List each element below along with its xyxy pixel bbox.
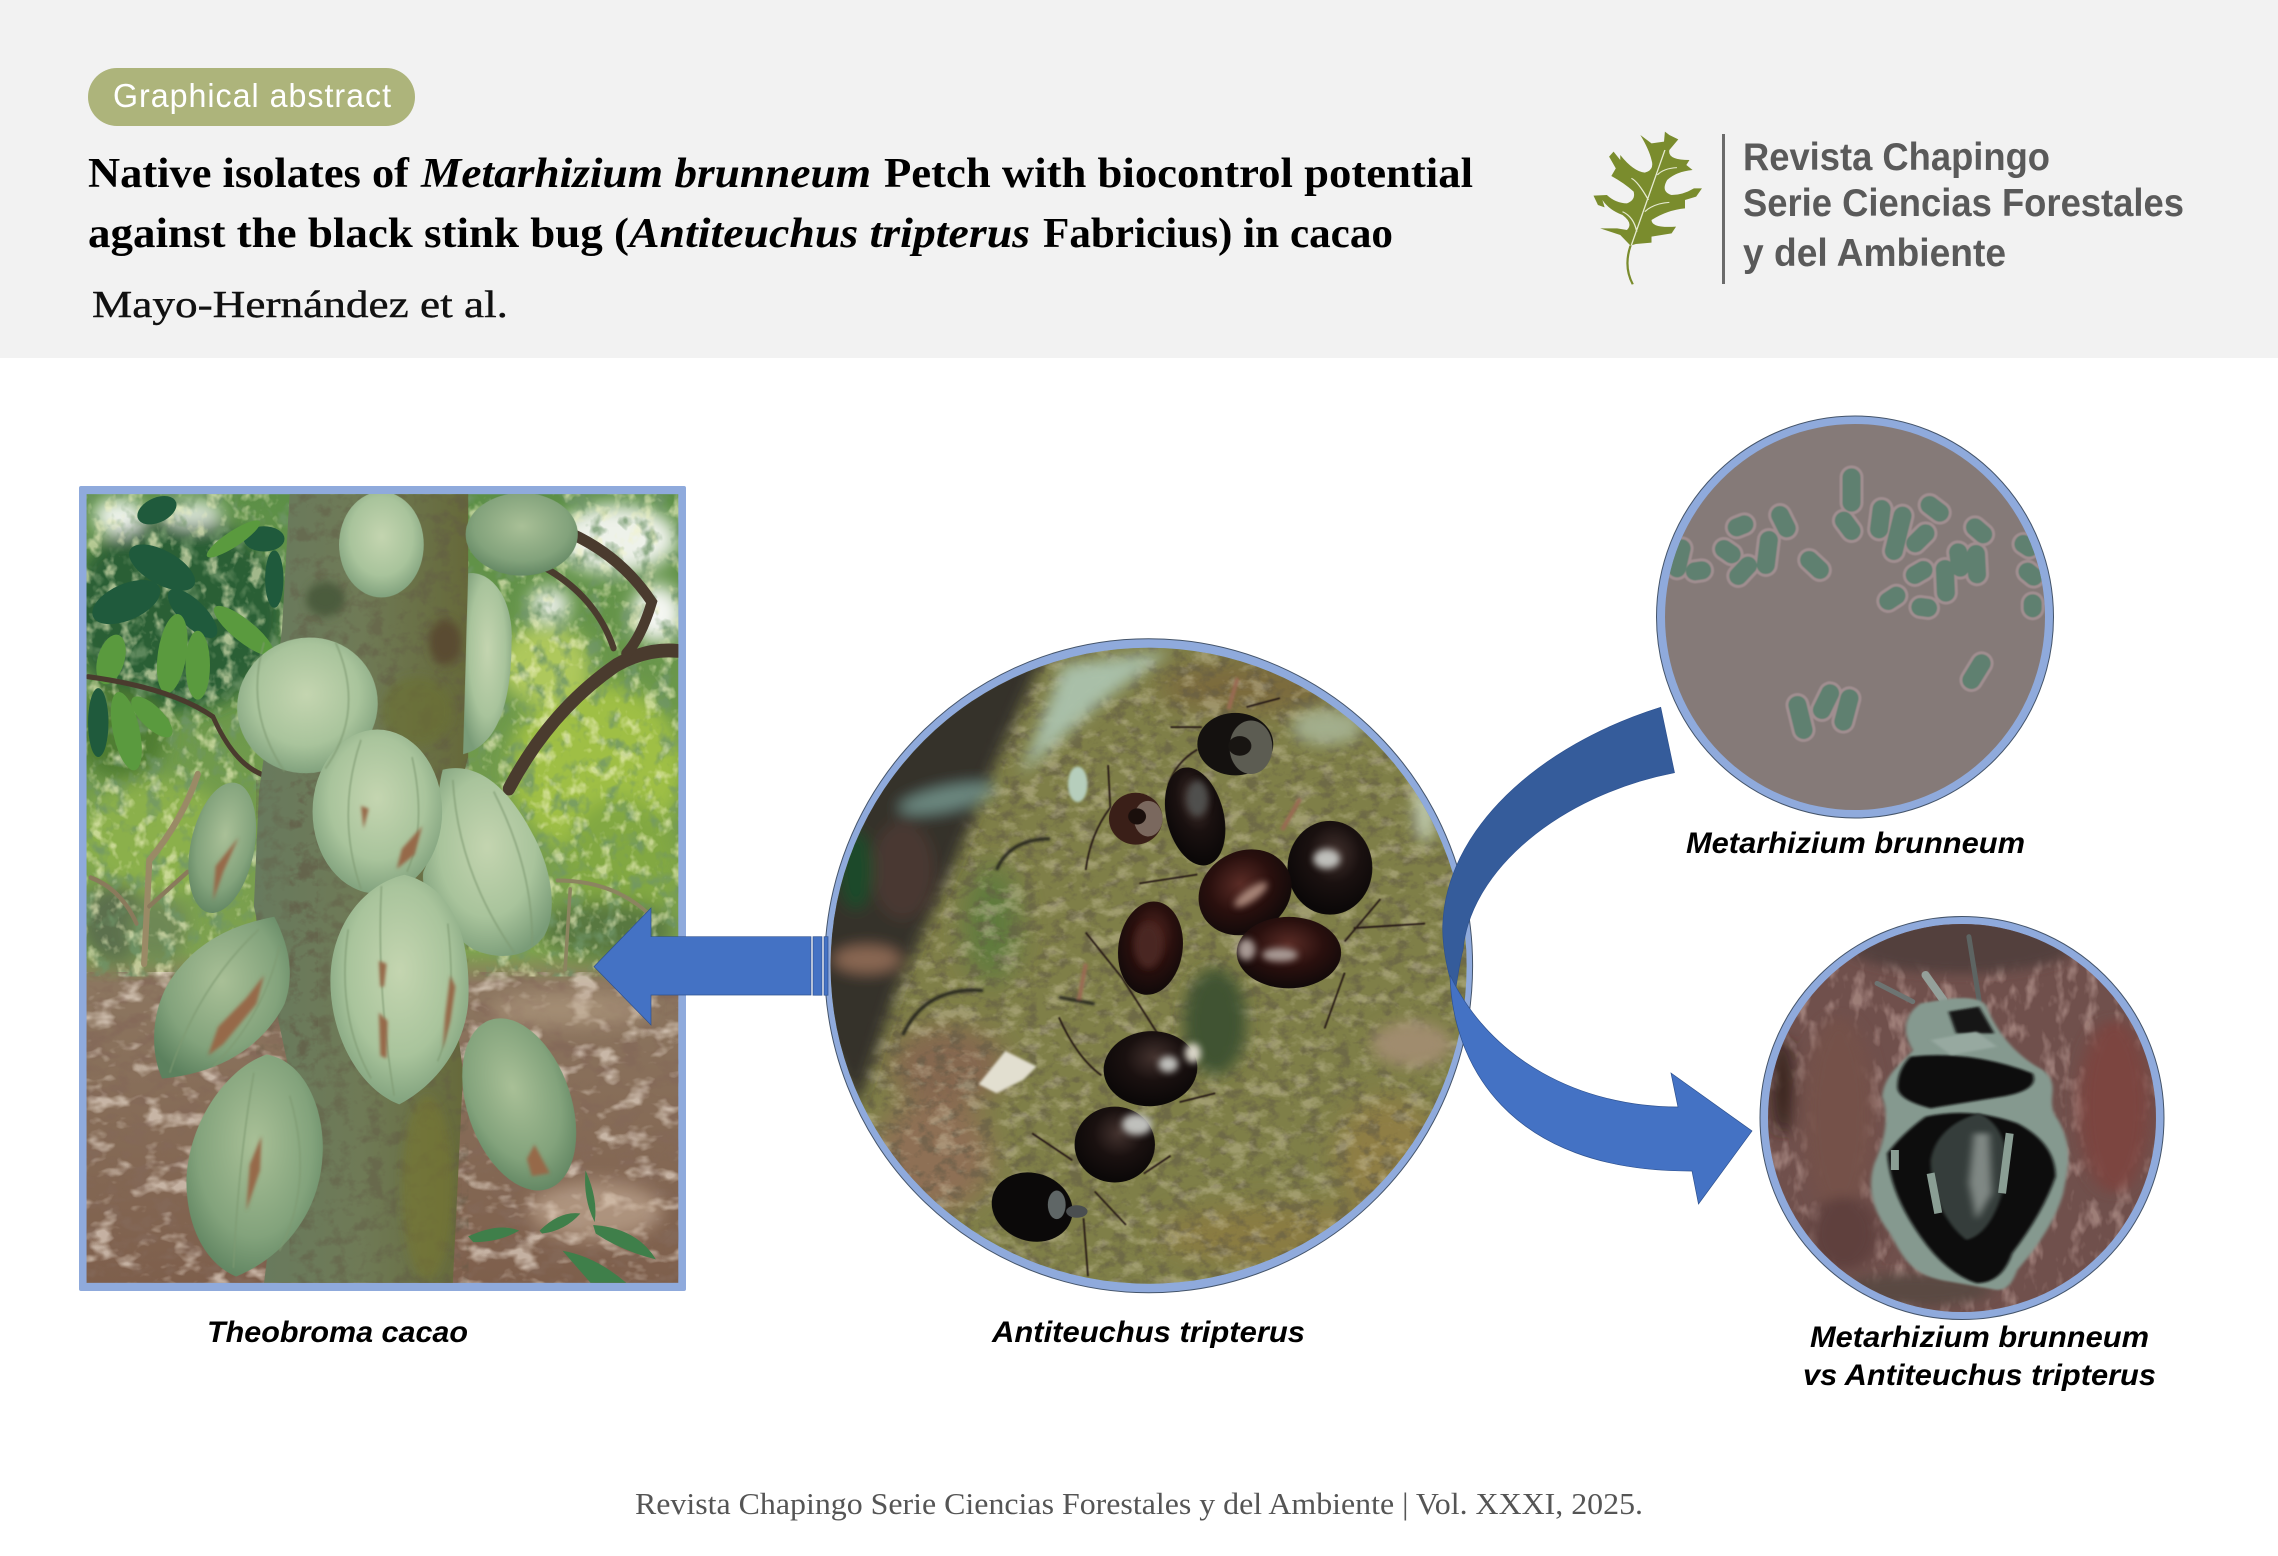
tree trunk bbox=[254, 494, 468, 1283]
cacao pods bbox=[154, 492, 599, 1277]
authors: Mayo-Hernández et al. bbox=[92, 284, 508, 326]
spores bbox=[1677, 477, 2034, 730]
title: Metarhizium brunneum bbox=[420, 151, 871, 197]
groundcover seedlings bbox=[468, 1170, 656, 1283]
caption: Metarhizium brunneum vs Antiteuchus tripterus bbox=[1803, 1321, 2156, 1392]
panel: Antiteuchus tripterus photo bbox=[825, 638, 1474, 1294]
footer citation: Revista Chapingo Serie Ciencias Forestales y del Ambiente | Vol. XXXI, 2025. bbox=[635, 1486, 1643, 1521]
badge: graphical abstract: Graphical abstract bbox=[113, 77, 392, 114]
logo text bbox=[1743, 136, 2184, 275]
branches bbox=[88, 533, 677, 969]
leaf litter bbox=[87, 972, 678, 1283]
title: against the black stink bug ( bbox=[88, 211, 629, 257]
mould crust and body bbox=[1871, 998, 2068, 1290]
logo text: y del Ambiente bbox=[1743, 232, 2006, 275]
logo divider bbox=[1722, 134, 1725, 284]
panel: Theobroma cacao photo bbox=[70, 486, 686, 1291]
logo text: Serie Ciencias Forestales bbox=[1743, 182, 2184, 225]
badge: graphical abstract bbox=[88, 68, 415, 126]
title: Petch with biocontrol potential bbox=[884, 151, 1473, 197]
title bbox=[88, 151, 1473, 257]
foliage and sky bbox=[70, 499, 682, 964]
title: Native isolates of bbox=[88, 151, 410, 197]
caption: Theobroma cacao: Theobroma cacao bbox=[207, 1316, 468, 1349]
caption: Metarhizium brunneum vs Antiteuchus tripterus: vs Antiteuchus tripterus bbox=[1803, 1359, 2156, 1392]
panel: Metarhizium brunneum micrograph bbox=[1650, 410, 2060, 820]
stink bugs bbox=[983, 698, 1425, 1276]
panel: infected stink bug photo bbox=[1752, 913, 2176, 1323]
curved arrow: stink bug to fungus and infected bug bbox=[1443, 707, 1752, 1204]
arrow: from stink bug to cacao bbox=[594, 908, 828, 1025]
antennae bbox=[1877, 937, 1979, 1002]
title: Fabricius) in cacao bbox=[1043, 211, 1393, 257]
logo text: Revista Chapingo bbox=[1743, 136, 2050, 179]
caption: Metarhizium brunneum: Metarhizium brunneum bbox=[1686, 827, 2025, 860]
caption: Antiteuchus tripterus: Antiteuchus tripterus bbox=[991, 1316, 1305, 1349]
icon: oak leaf logo bbox=[1593, 132, 1702, 284]
title: Antiteuchus tripterus bbox=[626, 211, 1030, 257]
pod ribs and scars bbox=[170, 642, 532, 1268]
header band bbox=[0, 0, 2278, 358]
caption: Metarhizium brunneum vs Antiteuchus tripterus: Metarhizium brunneum bbox=[1810, 1321, 2149, 1354]
canopy leaves bbox=[87, 490, 284, 774]
